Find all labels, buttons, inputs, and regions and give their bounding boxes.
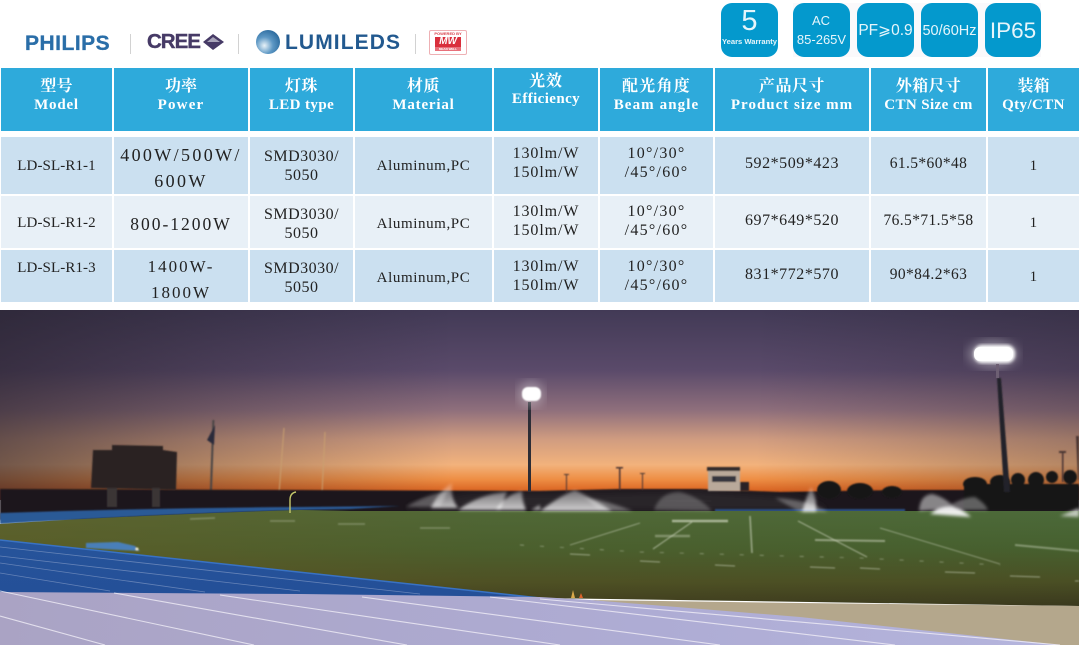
row 3: efficiency: 150lm/W	[513, 277, 579, 294]
header: model: Model	[34, 97, 79, 113]
badge: frequency: 50/60Hz	[922, 23, 976, 39]
goal upright base	[290, 492, 296, 513]
header: quantity per carton: 装箱	[1017, 73, 1050, 96]
row 2: LED type: SMD3030/	[264, 206, 339, 223]
grass field	[0, 510, 1079, 606]
header: carton size: 外箱尺寸	[896, 73, 961, 96]
logo: Mean Well: MW	[439, 36, 457, 47]
header: quantity per carton	[988, 68, 1079, 131]
row 1: quantity	[988, 137, 1079, 194]
row 2: carton size	[871, 196, 986, 248]
row 2: power: 800-1200W	[130, 214, 232, 234]
row 2: model	[1, 196, 112, 248]
row 2: efficiency: 130lm/W	[513, 203, 579, 220]
logo: Lumileds: LUMILEDS	[285, 31, 401, 54]
row 2: product size	[715, 196, 869, 248]
row 3: material	[355, 250, 492, 302]
row 3: beam angle: 10°/30°	[628, 258, 686, 275]
misty background behind sprinklers	[400, 492, 830, 510]
near blue running track	[0, 540, 540, 598]
row 3: model	[1, 250, 112, 302]
header: power: 功率	[165, 73, 197, 96]
row 1: power: 400W/500W/	[120, 145, 242, 165]
distant tree line	[0, 470, 1079, 520]
header: material	[355, 68, 492, 131]
row 2: efficiency	[494, 196, 598, 248]
row 1: beam angle	[600, 137, 713, 194]
header: efficiency: Efficiency	[512, 91, 580, 107]
row 1: product size	[715, 137, 869, 194]
far blue track	[0, 506, 905, 524]
sand strip	[590, 600, 1079, 645]
badge: AC input voltage: AC	[812, 13, 830, 28]
press box	[707, 467, 749, 491]
row 3: product size	[715, 250, 869, 302]
row 3: efficiency: 130lm/W	[513, 258, 579, 275]
row 2: efficiency: 150lm/W	[513, 222, 579, 239]
row 3: product size: 831*772*570	[745, 266, 839, 283]
row 1: LED type	[250, 137, 353, 194]
row 3: LED type: SMD3030/	[264, 260, 339, 277]
header: material: Material	[392, 97, 455, 113]
row 3: LED type	[250, 250, 353, 302]
row 1: power: 600W	[154, 171, 208, 191]
header: product size: 产品尺寸	[759, 73, 825, 96]
header: model	[1, 68, 112, 131]
badge: power factor: PF⩾0.9	[858, 22, 913, 39]
logo: Mean Well: MEAN WELL	[439, 47, 457, 51]
header: LED type: 灯珠	[285, 73, 318, 96]
row 3: LED type: 5050	[284, 279, 318, 296]
header: efficiency: 光效	[529, 68, 563, 91]
header: product size: Product size mm	[731, 97, 853, 113]
logo: Cree: CREE	[147, 30, 200, 53]
specification table	[1, 68, 1079, 302]
row 1: beam angle: /45°/60°	[625, 164, 688, 181]
certification badges	[721, 3, 1041, 57]
header: material: 材质	[407, 73, 440, 96]
badge: 5 years warranty	[721, 3, 778, 57]
scoreboard silhouette	[91, 445, 177, 507]
badge: 5 years warranty: 5	[741, 5, 758, 37]
header: power	[114, 68, 248, 131]
row 2: LED type: 5050	[284, 225, 318, 242]
photo: stadium lights at dusk over a sports field	[0, 310, 1079, 645]
stadium light near centre	[518, 381, 544, 492]
header: model: 型号	[40, 73, 73, 96]
row 1: product size: 592*509*423	[745, 155, 839, 172]
row 1: power	[114, 137, 248, 194]
header: LED type	[250, 68, 353, 131]
row 2: carton size: 76.5*71.5*58	[883, 212, 974, 229]
flag and pole	[207, 420, 215, 508]
header: quantity per carton: Qty/CTN	[1002, 97, 1065, 113]
goal posts	[279, 428, 325, 494]
light towers in background	[564, 436, 1079, 492]
row 2: power	[114, 196, 248, 248]
header: LED type: LED type	[269, 97, 334, 113]
row 1: quantity: 1	[1030, 158, 1037, 174]
row 2: model: LD-SL-R1-2	[17, 215, 96, 231]
header: carton size	[871, 68, 986, 131]
row 3: power: 1400W-	[148, 257, 214, 276]
lavender foreground track	[0, 592, 1060, 645]
row 1: efficiency: 150lm/W	[513, 164, 579, 181]
row 1: beam angle: 10°/30°	[628, 145, 686, 162]
row 2: beam angle	[600, 196, 713, 248]
badge: AC input voltage	[793, 3, 850, 57]
icon: Cree diamond	[203, 34, 224, 50]
row 3: carton size	[871, 250, 986, 302]
row 2: material: Aluminum,PC	[377, 216, 470, 232]
sky	[0, 310, 1079, 500]
row 1: model: LD-SL-R1-1	[17, 158, 96, 174]
header: efficiency	[494, 68, 598, 131]
row 3: power: 1800W	[151, 283, 211, 302]
row 2: quantity	[988, 196, 1079, 248]
row 1: carton size: 61.5*60*48	[890, 155, 967, 172]
row 1: material: Aluminum,PC	[377, 158, 470, 174]
row 3: power	[114, 250, 248, 302]
row 2: beam angle: 10°/30°	[628, 203, 686, 220]
badge: power factor	[857, 3, 914, 57]
row 1: material	[355, 137, 492, 194]
sprinkler water arcs	[406, 483, 1079, 517]
traffic cones	[571, 590, 583, 598]
row 3: beam angle	[600, 250, 713, 302]
row 1: carton size	[871, 137, 986, 194]
row 1: efficiency: 130lm/W	[513, 145, 579, 162]
row 2: material	[355, 196, 492, 248]
row 1: LED type: 5050	[284, 167, 318, 184]
field markings	[190, 516, 1079, 581]
brand logos row	[25, 30, 467, 55]
header: beam angle: Beam angle	[614, 97, 699, 113]
row 1: LED type: SMD3030/	[264, 148, 339, 165]
icon: Lumileds globe	[256, 30, 280, 54]
row 3: carton size: 90*84.2*63	[890, 266, 967, 283]
row 3: model: LD-SL-R1-3	[17, 260, 96, 276]
row 3: quantity: 1	[1030, 269, 1037, 285]
badge: frequency	[921, 3, 978, 57]
row 2: quantity: 1	[1030, 215, 1037, 231]
badge: AC input voltage: 85-265V	[797, 32, 846, 47]
row 3: material: Aluminum,PC	[377, 270, 470, 286]
header: carton size: CTN Size cm	[884, 97, 973, 113]
header: beam angle	[600, 68, 713, 131]
logo: Mean Well	[429, 30, 467, 55]
logo: Mean Well: POWERED BY	[434, 31, 462, 36]
row 2: product size: 697*649*520	[745, 212, 839, 229]
stadium light at right	[968, 340, 1018, 492]
logo: Philips: PHILIPS	[25, 32, 110, 55]
header: beam angle: 配光角度	[622, 73, 691, 96]
row 2: LED type	[250, 196, 353, 248]
badge: 5 years warranty: Years Warranty	[722, 37, 777, 46]
badge: IP65: IP65	[990, 18, 1036, 43]
header: power: Power	[158, 97, 204, 113]
row 3: beam angle: /45°/60°	[625, 277, 688, 294]
badge: IP65	[985, 3, 1041, 57]
row 3: quantity	[988, 250, 1079, 302]
row 1: model	[1, 137, 112, 194]
row 1: efficiency	[494, 137, 598, 194]
rolled mat on the track	[86, 542, 140, 551]
header: product size	[715, 68, 869, 131]
row 2: beam angle: /45°/60°	[625, 222, 688, 239]
row 3: efficiency	[494, 250, 598, 302]
